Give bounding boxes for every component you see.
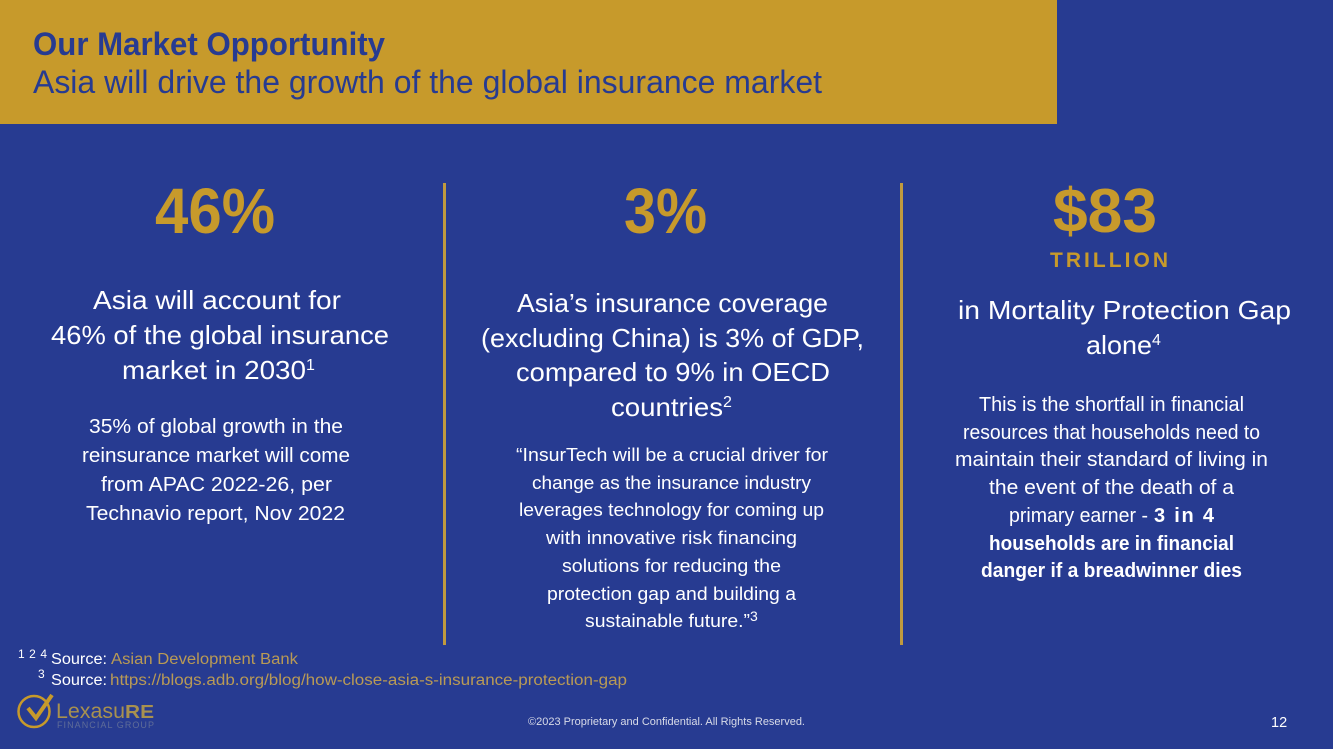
statement: Asia’s insurance coverage: [517, 288, 828, 318]
logo: RE: [125, 702, 154, 722]
quote: change as the insurance industry: [532, 472, 812, 493]
statement: [958, 295, 1291, 360]
statement: market in 2030: [122, 355, 306, 385]
stat: $83: $83: [1053, 177, 1157, 246]
detail text: households are in financial: [989, 533, 1234, 555]
detail text: danger if a breadwinner dies: [981, 560, 1242, 582]
logo: Lexasu: [56, 700, 125, 723]
quote: sustainable future.”: [585, 610, 750, 631]
panel: 83 trillion: [955, 177, 1291, 582]
quote: leverages technology for coming up: [519, 499, 824, 520]
statement: 46% of the global insurance: [51, 320, 389, 350]
detail text: [82, 416, 350, 525]
logo: [18, 695, 154, 730]
quote: with innovative risk financing: [545, 527, 797, 548]
detail text: This is the shortfall in financial: [979, 394, 1244, 416]
quote: solutions for reducing the: [562, 555, 781, 576]
stat: 3%: 3%: [624, 175, 707, 247]
detail text: maintain their standard of living in: [955, 449, 1268, 471]
detail text: reinsurance market will come: [82, 445, 350, 467]
sources: Asian Development Bank: [111, 651, 298, 668]
sources: https://blogs.adb.org/blog/how-close-asia-s-insurance-protection-gap: [110, 672, 627, 689]
sources: 3: [38, 667, 45, 681]
statement: 4: [1152, 332, 1161, 349]
subtitle: Asia will drive the growth of the global insurance market: [33, 64, 822, 100]
copyright: ©2023 Proprietary and Confidential. All Rights Reserved.: [528, 716, 805, 728]
quote: “InsurTech will be a crucial driver for: [516, 444, 828, 465]
logo: FINANCIAL GROUP: [57, 720, 154, 730]
panel: 46 percent: [51, 175, 389, 525]
statement: alone: [1086, 330, 1152, 360]
statement: Asia will account for: [93, 285, 341, 315]
detail text: 35% of global growth in the: [89, 416, 343, 438]
sources: Source:: [51, 672, 107, 689]
detail text: 3 in 4: [1154, 505, 1215, 527]
title: Our Market Opportunity: [33, 26, 385, 62]
statement: (excluding China) is 3% of GDP,: [481, 323, 864, 353]
detail text: the event of the death of a: [989, 477, 1235, 499]
detail text: primary earner -: [1009, 505, 1148, 527]
detail text: from APAC 2022-26, per: [101, 474, 332, 496]
header banner: [0, 0, 1057, 124]
icon: check mark circle: [18, 695, 52, 727]
detail text: Technavio report, Nov 2022: [86, 503, 345, 525]
sources: [18, 647, 627, 689]
statement: [51, 285, 389, 385]
sources: 1 2 4: [18, 647, 47, 661]
stat unit: TRILLION: [1050, 249, 1168, 272]
statement: in Mortality Protection Gap: [958, 295, 1291, 325]
statement: compared to 9% in OECD: [516, 357, 830, 387]
quote: [516, 444, 828, 631]
statement: countries: [611, 392, 723, 422]
panel: 3 percent: [481, 175, 864, 631]
statement: [481, 288, 864, 422]
detail text: resources that households need to: [963, 422, 1260, 444]
detail text: [955, 394, 1268, 582]
statement: 2: [723, 394, 732, 411]
quote: 3: [750, 608, 758, 624]
statement: 1: [306, 357, 315, 374]
sources: Source:: [51, 651, 107, 668]
page number: 12: [1271, 715, 1287, 731]
stat: 46%: 46%: [155, 175, 275, 247]
quote: protection gap and building a: [547, 583, 797, 604]
